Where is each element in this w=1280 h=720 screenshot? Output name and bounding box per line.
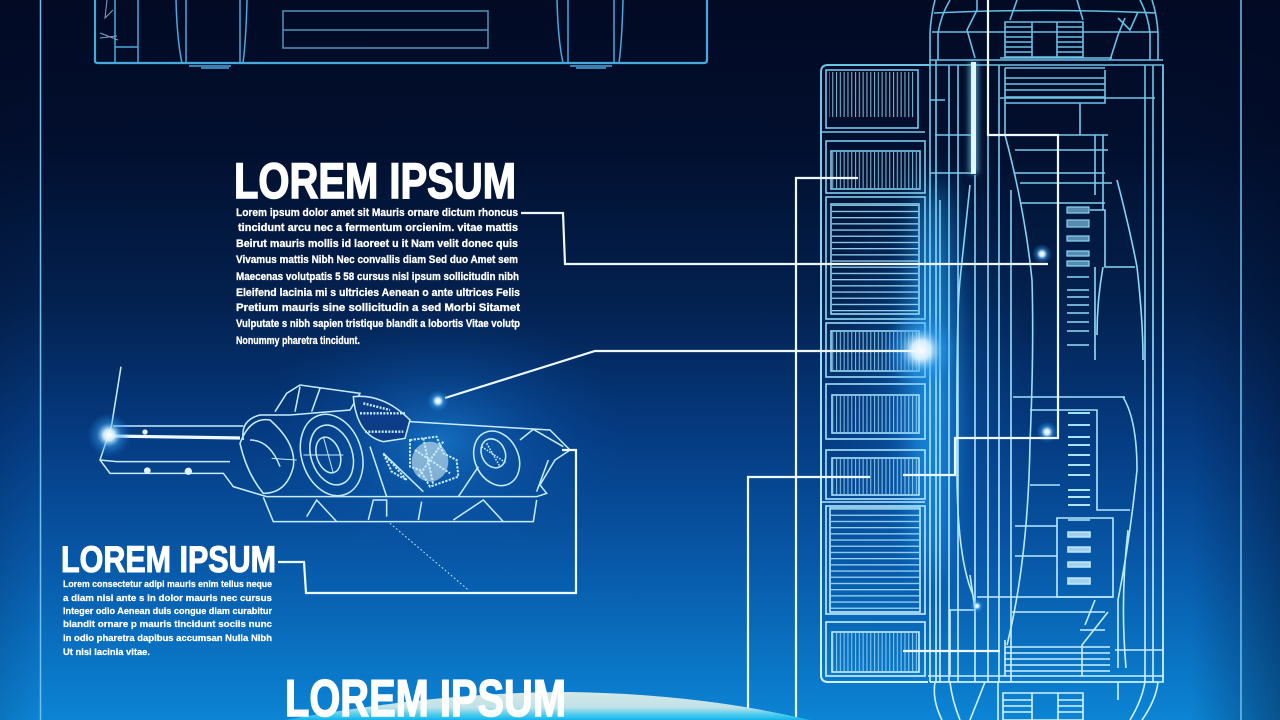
text block: middle: a diam nisi ante s in dolor mauris nec cursus xyxy=(63,593,272,604)
leader: vehicle arm xyxy=(110,436,240,438)
vehicle blueprint xyxy=(100,367,570,590)
curves xyxy=(957,185,973,595)
leader: vehicle dot to glow xyxy=(445,351,920,398)
glow beam behind right device xyxy=(912,180,952,580)
text block: middle: in odio pharetra dapibus accumsan Nulla Nibh xyxy=(63,633,272,644)
heading: middle: LOREM IPSUM xyxy=(61,539,276,580)
bottom dome xyxy=(928,676,1163,720)
left column panels xyxy=(821,65,930,682)
leader: bottom panel xyxy=(903,650,1000,652)
leader: second text to vehicle xyxy=(278,450,576,593)
text block: top xyxy=(236,207,520,347)
text block: top: Maecenas volutpatis 5 58 cursus nisl ipsum sollicitudin nibh xyxy=(236,271,519,283)
text block: middle xyxy=(63,579,272,658)
text block: middle: Lorem consectetur adipi mauris enim tellus neque xyxy=(63,579,272,590)
text block: top: Beirut mauris mollis id laoreet u it Nam velit donec quis xyxy=(236,238,518,250)
top dome xyxy=(930,0,1158,60)
vents xyxy=(1067,207,1089,266)
text block: middle: Ut nisi lacinia vitae. xyxy=(63,647,150,658)
text block: top: Nonummy pharetra tincidunt. xyxy=(236,335,360,347)
heading: top: LOREM IPSUM xyxy=(234,153,516,209)
body verticals xyxy=(930,60,1163,682)
text block: top: Vulputate s nibh sapien tristique blandit a lobortis Vitae volutp xyxy=(236,318,520,330)
vehicle lights xyxy=(87,390,449,457)
upper hatch xyxy=(1000,68,1155,135)
text block: middle: blandit ornare p mauris tincidunt sociis nunc xyxy=(63,619,272,630)
text block: top: Eleifend lacinia mi s ultricies Aenean o ante ultrices Felis xyxy=(236,287,520,299)
text block: middle: Integer odio Aenean duis congue diam curabitur xyxy=(63,606,272,617)
lower xyxy=(950,575,1113,676)
top device blueprint xyxy=(95,0,707,68)
leader: top panel xyxy=(796,178,858,720)
leader: lower panel xyxy=(748,477,870,720)
planet horizon xyxy=(285,692,810,720)
text block: top: Pretium mauris sine sollicitudin a sed Morbi Sitamet xyxy=(236,302,520,314)
right device blueprint xyxy=(821,0,1163,720)
leader lines xyxy=(110,0,1058,720)
glow lights on right device xyxy=(883,62,1058,613)
leader: top to center xyxy=(903,0,1058,475)
text block: top: Vivamus mattis Nibh Nec convallis diam Sed duo Amet sem xyxy=(236,254,518,266)
leader: first text to body xyxy=(521,213,1048,264)
text block: top: tincidunt arcu nec a fermentum orcienim. vitae mattis xyxy=(238,222,518,234)
text block: top: Lorem ipsum dolor amet sit Mauris ornare dictum rhoncus xyxy=(236,207,518,219)
